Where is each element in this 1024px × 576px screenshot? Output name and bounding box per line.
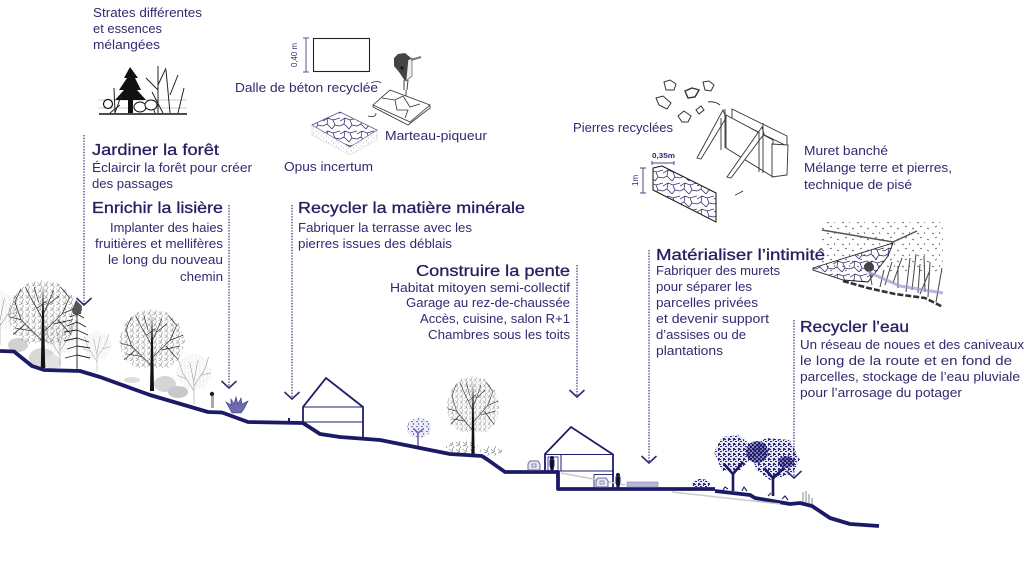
icon: stone wall block	[631, 151, 716, 222]
arrow: construire la pente	[570, 265, 584, 397]
heading and text: construire la pente	[390, 263, 571, 342]
icon: swale with grasses and stone wall	[813, 222, 943, 307]
label: pierres recyclées: Pierres recyclées	[573, 121, 673, 135]
heading and text: matérialiser l'intimité: parcelles privées	[656, 296, 758, 310]
arrow: matérialiser l'intimité	[642, 250, 656, 463]
arrow: jardiner la forêt	[76, 135, 92, 305]
vegetation: forest trees	[0, 280, 213, 404]
label: dalle de béton recyclée: Dalle de béton recyclée	[235, 81, 378, 95]
icon: jackhammer	[394, 53, 421, 100]
heading and text: jardiner la forêt: Éclaircir la forêt pour créer	[92, 160, 252, 175]
purple hedge shrub	[226, 397, 248, 413]
heading and text: construire la pente: Garage au rez-de-chaussée	[406, 296, 570, 310]
big bare tree	[446, 376, 502, 456]
icon: cracked slab	[368, 82, 430, 125]
heading and text: recycler la matière minérale: Fabriquer la terrasse avec les	[298, 221, 472, 235]
label: muret banché: technique de pisé	[804, 178, 912, 192]
text: strates: Strates différentes	[93, 6, 202, 20]
heading and text: recycler l'eau: Recycler l’eau	[800, 319, 909, 336]
text: strates: mélangées	[93, 38, 160, 52]
heading and text: enrichir la lisière: Implanter des haies	[110, 221, 223, 235]
icon: opus incertum paving	[312, 112, 377, 155]
house on upper slope	[303, 378, 363, 438]
heading and text: construire la pente: Habitat mitoyen semi-collectif	[390, 281, 571, 295]
icon: stone wall block: 1m	[631, 175, 640, 186]
heading and text: recycler l'eau: pour l’arrosage du potager	[800, 386, 962, 400]
heading and text: recycler la matière minérale: Recycler la matière minérale	[298, 200, 525, 217]
heading and text: jardiner la forêt	[92, 142, 252, 191]
heading and text: matérialiser l'intimité: Matérialiser l’intimité	[656, 247, 825, 264]
arrow: enrichir la lisière	[222, 205, 236, 388]
heading and text: matérialiser l'intimité: et devenir support	[656, 312, 770, 326]
terrain lower slope	[715, 491, 879, 526]
grey drainage line	[672, 492, 780, 504]
heading and text: recycler l'eau: parcelles, stockage de l’eau pluviale	[800, 370, 1020, 384]
label: muret banché: Mélange terre et pierres,	[804, 161, 952, 175]
icon: recycled stones	[656, 80, 720, 122]
label: opus incertum: Opus incertum	[284, 160, 373, 174]
label: muret banché	[804, 144, 952, 192]
diagram: concrete slab dimension	[290, 38, 370, 72]
icon: stone wall block: 0,35m	[652, 151, 675, 160]
heading and text: recycler la matière minérale: pierres issues des déblais	[298, 237, 452, 251]
heading and text: jardiner la forêt: des passages	[92, 177, 173, 191]
heading and text: jardiner la forêt: Jardiner la forêt	[92, 142, 220, 159]
heading and text: construire la pente: Construire la pente	[416, 263, 570, 280]
heading and text: matérialiser l'intimité: plantations	[656, 344, 723, 358]
heading and text: enrichir la lisière: le long du nouveau	[108, 253, 223, 267]
heading and text: recycler l'eau	[800, 319, 1024, 400]
heading and text: construire la pente: Chambres sous les toits	[428, 328, 570, 342]
semi-collective house	[528, 427, 658, 489]
heading and text: recycler la matière minérale	[298, 200, 525, 251]
icon: rammed earth formwork	[697, 109, 788, 195]
heading and text: recycler l'eau: le long de la route et en fond de	[800, 354, 1012, 368]
heading and text: matérialiser l'intimité: pour séparer les	[656, 280, 752, 294]
figure on the path	[210, 392, 214, 408]
heading and text: matérialiser l'intimité: d’assises ou de	[656, 328, 746, 342]
icon: mixed forest strata	[99, 66, 187, 114]
terrain ground line	[0, 351, 715, 489]
heading and text: matérialiser l'intimité: Fabriquer des murets	[656, 264, 780, 278]
text: strates: et essences	[93, 22, 162, 36]
text: strates	[93, 6, 202, 52]
heading and text: enrichir la lisière: Enrichir la lisière	[92, 200, 223, 217]
heading and text: enrichir la lisière: chemin	[180, 270, 223, 284]
diagram: concrete slab dimension: 0,40 m	[290, 43, 299, 67]
heading and text: construire la pente: Accès, cuisine, salon R+1	[420, 312, 570, 326]
heading and text: enrichir la lisière	[92, 200, 223, 284]
label: muret banché: Muret banché	[804, 144, 888, 158]
arrow: recycler l'eau	[786, 320, 802, 478]
heading and text: recycler l'eau: Un réseau de noues et des caniveaux	[800, 338, 1024, 352]
post on path	[288, 418, 290, 422]
label: marteau-piqueur: Marteau-piqueur	[385, 129, 487, 143]
purple orchard trees	[692, 435, 812, 505]
arrow: recycler la matière minérale	[284, 205, 300, 399]
heading and text: matérialiser l'intimité	[656, 247, 825, 358]
purple small tree	[407, 418, 431, 447]
heading and text: enrichir la lisière: fruitières et mellifères	[95, 237, 223, 251]
